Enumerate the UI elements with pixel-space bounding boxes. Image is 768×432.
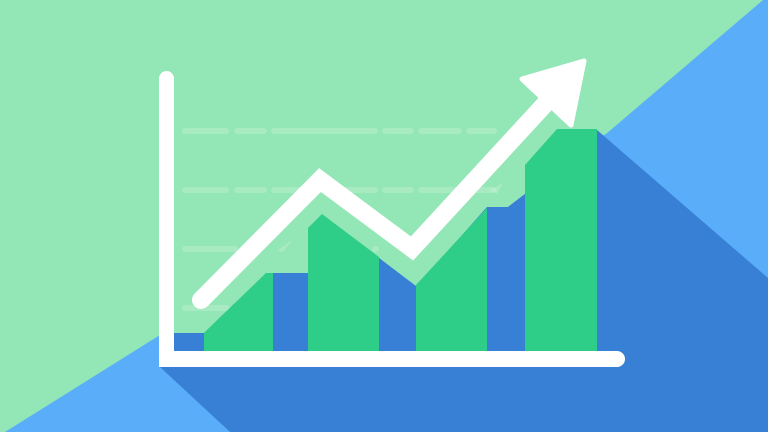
horizontal axis <box>159 351 625 367</box>
bar 5: blue <box>379 258 416 351</box>
bar 8: green <box>525 129 597 351</box>
bar 2: green <box>204 273 273 351</box>
chart axes <box>159 71 625 367</box>
bar 4: green <box>308 214 379 351</box>
grid line 1 <box>182 128 497 134</box>
long drop shadow of chart <box>160 130 768 432</box>
arrow head <box>522 61 584 125</box>
grid line 4 <box>182 305 230 311</box>
arrow shaft <box>201 103 546 300</box>
bar 7: blue <box>487 194 525 351</box>
bar chart <box>174 129 597 351</box>
grid line 2 <box>182 183 503 194</box>
grid line 3 <box>182 239 379 252</box>
bar 3: blue <box>273 273 308 351</box>
bar 1: blue <box>174 333 204 351</box>
bar 6: green <box>416 208 487 351</box>
grid lines <box>182 128 503 311</box>
rising trend arrow <box>201 61 584 300</box>
green plot area behind bars <box>174 100 597 333</box>
vertical axis <box>159 71 174 367</box>
